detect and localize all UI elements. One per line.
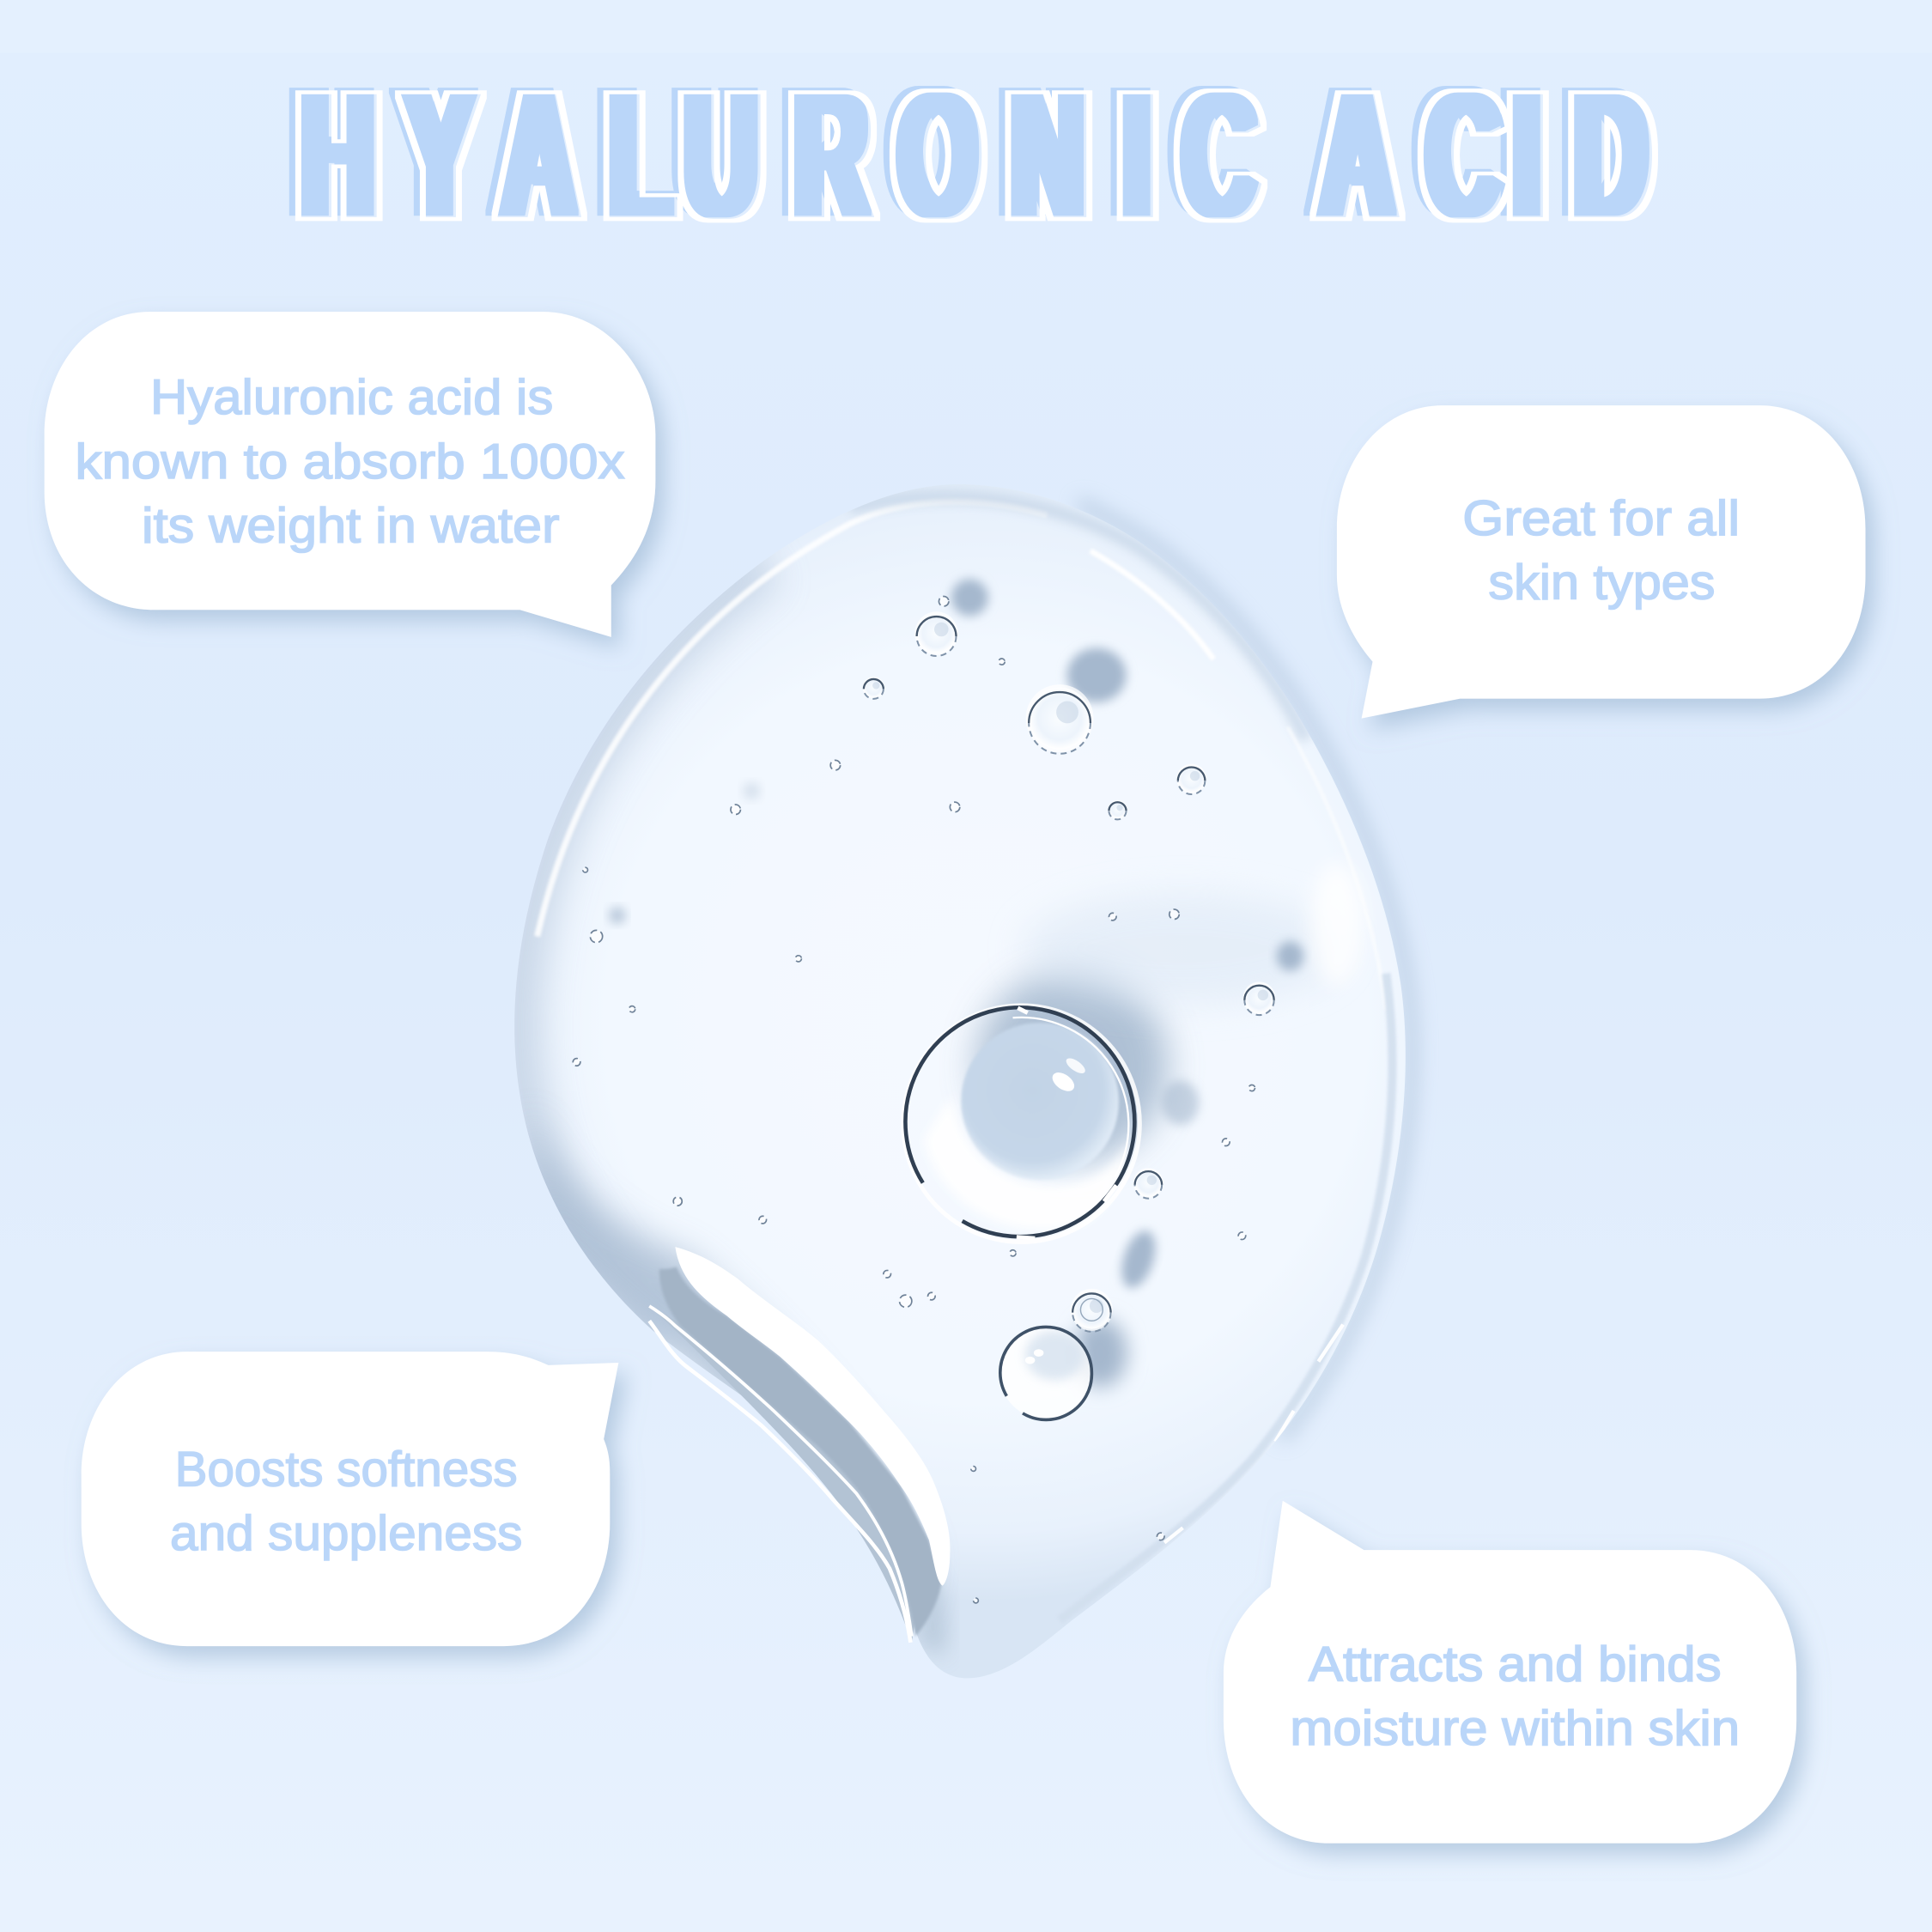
inner fold stripe <box>649 1306 912 1637</box>
callout text <box>76 370 625 553</box>
callout text: skin types <box>1488 555 1715 610</box>
bubble ring inner line <box>1013 1018 1128 1176</box>
cast shadow under central bubble <box>975 969 1168 1162</box>
outer fold stripe <box>649 1321 910 1643</box>
callout: moisture <box>1224 1501 1796 1844</box>
callout text: Hyaluronic acid is <box>150 370 553 425</box>
callout text: known to absorb 1000x <box>76 434 625 489</box>
title outline layer: HYALURONIC ACID <box>302 56 1649 255</box>
speech bubble <box>82 1352 618 1646</box>
speech bubble <box>1337 405 1866 719</box>
title fill layer: HYALURONIC ACID <box>295 52 1641 251</box>
top band <box>0 0 1932 53</box>
bubble glow <box>924 1097 1131 1230</box>
callout: absorb water <box>45 312 655 637</box>
white crescent highlight <box>675 1247 951 1586</box>
ring glints <box>1017 1008 1116 1238</box>
top rim highlight <box>538 501 1048 937</box>
right sheen <box>1091 550 1213 659</box>
speech bubble <box>1224 1501 1796 1844</box>
dark crescent fold <box>659 1267 941 1637</box>
callout: softness <box>82 1352 618 1646</box>
gel outer shadow <box>1078 502 1412 1439</box>
right rim shade <box>1113 972 1398 1578</box>
top rim inner shade <box>850 496 1306 739</box>
callout text: moisture within skin <box>1290 1701 1740 1756</box>
stripe fold shade <box>649 1306 921 1643</box>
bubble ring highlight <box>903 1005 1139 1242</box>
bubble ring <box>905 1007 1134 1236</box>
callout text: its weight in water <box>142 498 559 553</box>
right sheen lower <box>1288 728 1300 749</box>
right rim glints <box>1163 1324 1345 1544</box>
gel drop <box>514 484 1412 1678</box>
left rim shading <box>514 561 764 1343</box>
callout text <box>1290 1637 1740 1756</box>
callout text: Attracts and binds <box>1309 1637 1722 1692</box>
callout text: and suppleness <box>170 1506 522 1561</box>
title <box>295 52 1649 255</box>
speech bubble <box>45 312 655 637</box>
medium bubbles <box>863 611 1275 1419</box>
central bubble <box>903 1005 1139 1242</box>
gel interior shading <box>514 496 1392 1657</box>
tiny bubbles <box>573 597 1255 1603</box>
soft shade past crescent tip <box>918 1552 947 1657</box>
soft haze right of centre <box>1034 897 1312 1005</box>
second highlight <box>1064 1055 1088 1076</box>
callout text: Great for all <box>1462 491 1740 546</box>
small bubbles <box>573 597 1275 1603</box>
callout text <box>1462 491 1740 610</box>
bubble lens <box>961 1023 1119 1181</box>
specular highlight <box>1049 1069 1078 1095</box>
bubble shadows <box>609 579 1303 1388</box>
right white patch <box>1309 874 1359 979</box>
lower left shadow pool <box>529 1133 925 1531</box>
callout text <box>170 1443 522 1561</box>
callout: skin types <box>1337 405 1866 719</box>
callout text: Boosts softness <box>175 1443 518 1498</box>
gel body <box>514 484 1406 1678</box>
